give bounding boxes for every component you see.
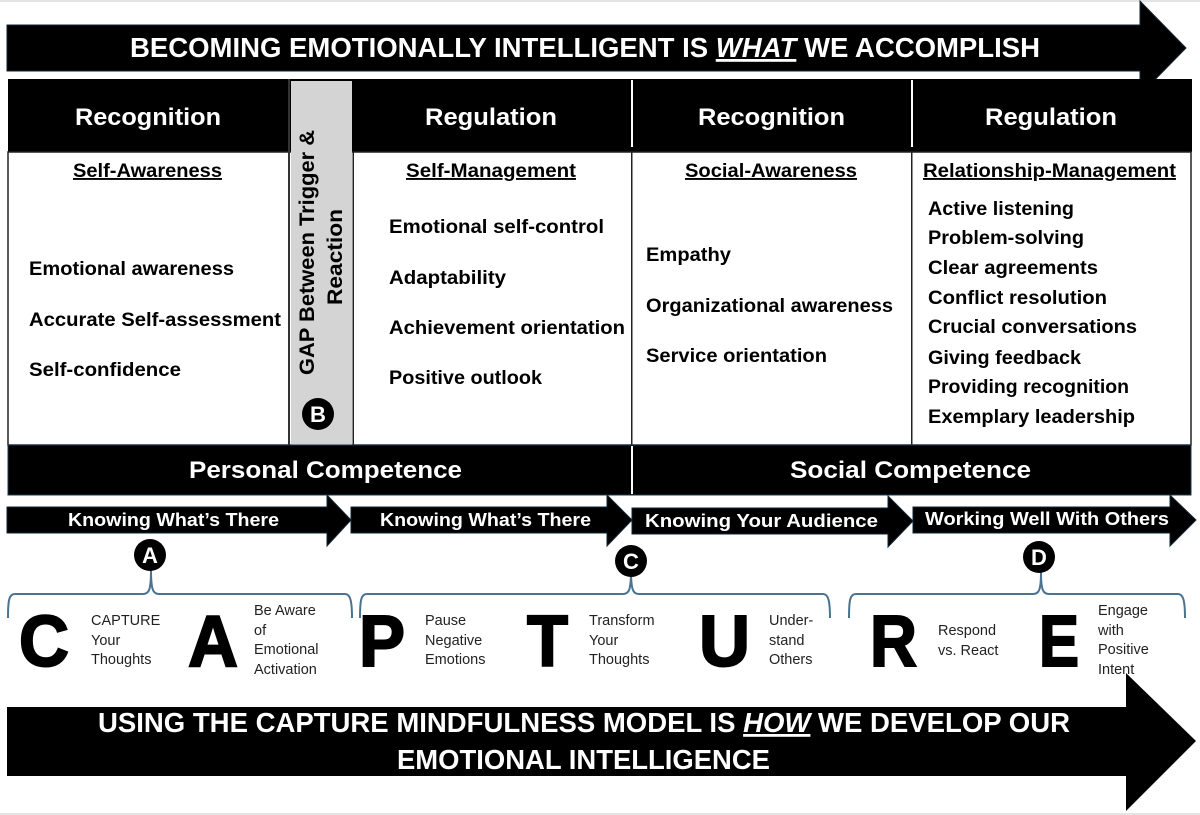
arrow: working well with others: Working Well With Others	[925, 509, 1169, 529]
marker B	[302, 398, 334, 430]
column: self-management: Positive outlook	[389, 368, 542, 389]
column: relationship-management: Crucial conversations	[928, 317, 1137, 338]
arrow: working well with others	[913, 495, 1196, 546]
marker A: A	[142, 543, 158, 568]
brace A	[8, 570, 352, 618]
arrow: knowing your audience	[632, 496, 913, 547]
competence bar: Social Competence	[790, 457, 1031, 484]
capture T: Transform	[589, 613, 655, 629]
arrow: knowing what's there 1	[7, 495, 351, 546]
capture U	[699, 602, 813, 682]
capture C: Your	[91, 633, 120, 649]
capture U: U	[699, 602, 750, 682]
top arrow banner: BECOMING EMOTIONALLY INTELLIGENT IS WHAT WE ACCOMPLISH	[130, 32, 1040, 63]
capture E: with	[1097, 623, 1124, 639]
column: relationship-management	[923, 104, 1177, 428]
capture R: R	[870, 602, 917, 682]
column: self-awareness: Emotional awareness	[29, 259, 234, 280]
marker C	[615, 545, 647, 577]
capture U: Under-	[769, 613, 813, 629]
capture U: Others	[769, 652, 813, 668]
capture T: Your	[589, 633, 618, 649]
marker D	[1023, 541, 1055, 573]
capture R: vs. React	[938, 643, 998, 659]
top arrow banner	[7, 1, 1186, 95]
column: self-awareness	[29, 104, 282, 381]
bottom arrow banner: EMOTIONAL INTELLIGENCE	[397, 744, 770, 775]
competency table	[8, 79, 1192, 445]
capture U: stand	[769, 633, 804, 649]
capture A: Activation	[254, 662, 317, 678]
column: self-awareness: Self-confidence	[29, 360, 181, 381]
column: social-awareness: Recognition	[698, 104, 845, 131]
capture E: Intent	[1098, 662, 1134, 678]
capture C: CAPTURE	[91, 613, 161, 629]
column: social-awareness: Social-Awareness	[685, 161, 857, 182]
column: social-awareness: Organizational awareness	[646, 296, 893, 317]
brace D	[849, 572, 1185, 618]
column: self-management: Adaptability	[389, 268, 506, 289]
capture C	[19, 602, 161, 682]
capture P: Negative	[425, 633, 482, 649]
gap column	[291, 81, 352, 445]
capture E	[1039, 602, 1149, 682]
capture T: Thoughts	[589, 652, 649, 668]
column: relationship-management: Providing recognition	[928, 377, 1129, 398]
capture P: Emotions	[425, 652, 485, 668]
capture E: E	[1039, 602, 1079, 682]
column: social-awareness: Empathy	[646, 245, 731, 266]
capture C: Thoughts	[91, 652, 151, 668]
column: relationship-management: Conflict resolution	[928, 288, 1107, 309]
arrow: knowing what's there 1: Knowing What’s There	[68, 510, 279, 530]
column: self-management	[389, 104, 625, 389]
capture R: Respond	[938, 623, 996, 639]
capture T	[527, 602, 655, 682]
column: self-awareness: Accurate Self-assessment	[29, 310, 282, 331]
capture E: Engage	[1098, 603, 1148, 619]
column: self-management: Self-Management	[406, 161, 577, 182]
competence bar	[8, 445, 1191, 495]
capture E: Positive	[1098, 642, 1149, 658]
column: relationship-management: Problem-solving	[928, 228, 1084, 249]
competence bar: Personal Competence	[189, 457, 462, 484]
capture P	[359, 602, 485, 682]
brace C	[360, 570, 830, 618]
column: social-awareness	[646, 104, 893, 367]
capture A	[188, 602, 318, 682]
column: self-awareness: Recognition	[75, 104, 221, 131]
capture A: Emotional	[254, 642, 318, 658]
capture C: C	[19, 602, 69, 682]
capture T: T	[527, 602, 568, 682]
marker C: C	[623, 549, 639, 574]
column: relationship-management: Relationship-Management	[923, 161, 1177, 182]
capture P: P	[359, 602, 405, 682]
bottom arrow banner: USING THE CAPTURE MINDFULNESS MODEL IS HOW WE DEVELOP OUR	[98, 707, 1070, 738]
capture P: Pause	[425, 613, 466, 629]
column: relationship-management: Giving feedback	[928, 348, 1081, 369]
gap column: Reaction	[324, 209, 347, 305]
column: self-management: Regulation	[425, 104, 557, 131]
marker A	[134, 539, 166, 571]
arrow: knowing what's there 2	[351, 495, 632, 546]
column: self-management: Achievement orientation	[389, 318, 625, 339]
column: relationship-management: Clear agreements	[928, 258, 1098, 279]
capture R	[870, 602, 998, 682]
arrow: knowing your audience: Knowing Your Audience	[645, 511, 878, 531]
capture A: of	[254, 623, 267, 639]
capture A: Be Aware	[254, 603, 316, 619]
arrow: knowing what's there 2: Knowing What’s There	[380, 510, 591, 530]
column: relationship-management: Regulation	[985, 104, 1117, 131]
column: relationship-management: Active listening	[928, 199, 1074, 220]
column: self-awareness: Self-Awareness	[73, 161, 222, 182]
bottom arrow banner	[7, 673, 1196, 811]
marker D: D	[1031, 545, 1047, 570]
column: self-management: Emotional self-control	[389, 217, 604, 238]
capture A: A	[188, 602, 238, 682]
marker B: B	[310, 402, 326, 427]
gap column: GAP Between Trigger &	[296, 130, 319, 375]
column: relationship-management: Exemplary leadership	[928, 407, 1135, 428]
column: social-awareness: Service orientation	[646, 346, 827, 367]
